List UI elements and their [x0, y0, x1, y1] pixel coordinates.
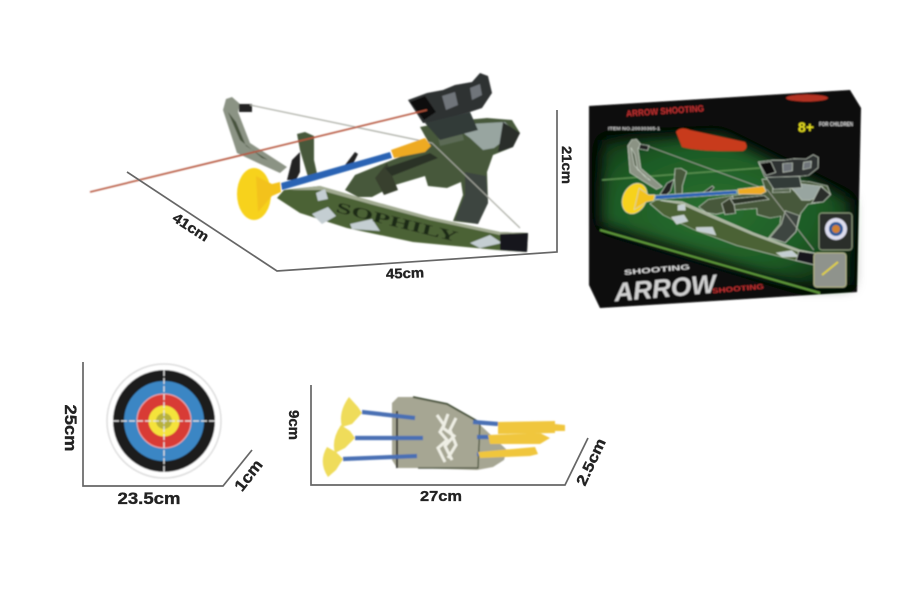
- arrow fletching: [478, 421, 565, 458]
- product box: [589, 90, 861, 308]
- label: width 27cm: 27cm: [420, 488, 462, 505]
- label: length 45cm: 45cm: [386, 264, 424, 282]
- label: depth 41cm: 41cm: [170, 209, 212, 245]
- box arrow badge: [814, 253, 846, 287]
- box model number: ITEM NO.20030365-1: [608, 126, 661, 131]
- crossbow dimension diagram: [90, 73, 575, 282]
- dimension lines: [83, 362, 252, 486]
- box main title: ARROW: [612, 268, 720, 307]
- box small title: SHOOTING: [624, 264, 691, 277]
- crossbow: [90, 73, 528, 252]
- label: height 9cm: 9cm: [285, 410, 302, 440]
- label: depth 2.5cm: 2.5cm: [573, 436, 610, 488]
- label: width 23.5cm: 23.5cm: [118, 489, 180, 508]
- box red flash: [676, 128, 747, 151]
- box target badge: [819, 213, 852, 250]
- laser beam: [90, 110, 427, 192]
- label: height 21cm: 21cm: [559, 146, 575, 184]
- box top right badge: [786, 94, 828, 102]
- target dimension diagram: [61, 362, 267, 508]
- box body: [589, 90, 861, 308]
- arrow shafts: [343, 412, 498, 459]
- arrows and quiver dimension diagram: [285, 385, 610, 505]
- box subtitle: SHOOTING: [712, 284, 765, 295]
- dimension lines: [127, 110, 557, 271]
- box green panel: [602, 135, 850, 285]
- box age badge: 8+: [798, 119, 814, 135]
- label: depth 1cm: 1cm: [232, 457, 267, 495]
- arrow suction cups: [323, 397, 362, 477]
- box age note: FOR CHILDREN: [819, 122, 853, 128]
- box top logo: ARROW SHOOTING: [626, 103, 704, 119]
- dimension lines: [311, 385, 588, 485]
- box crossbow picture: [603, 124, 847, 265]
- limb lettering: SOPHILY: [334, 200, 460, 246]
- quiver and arrows: [323, 397, 565, 477]
- label: height 25cm: 25cm: [61, 404, 80, 452]
- target board: [107, 364, 221, 478]
